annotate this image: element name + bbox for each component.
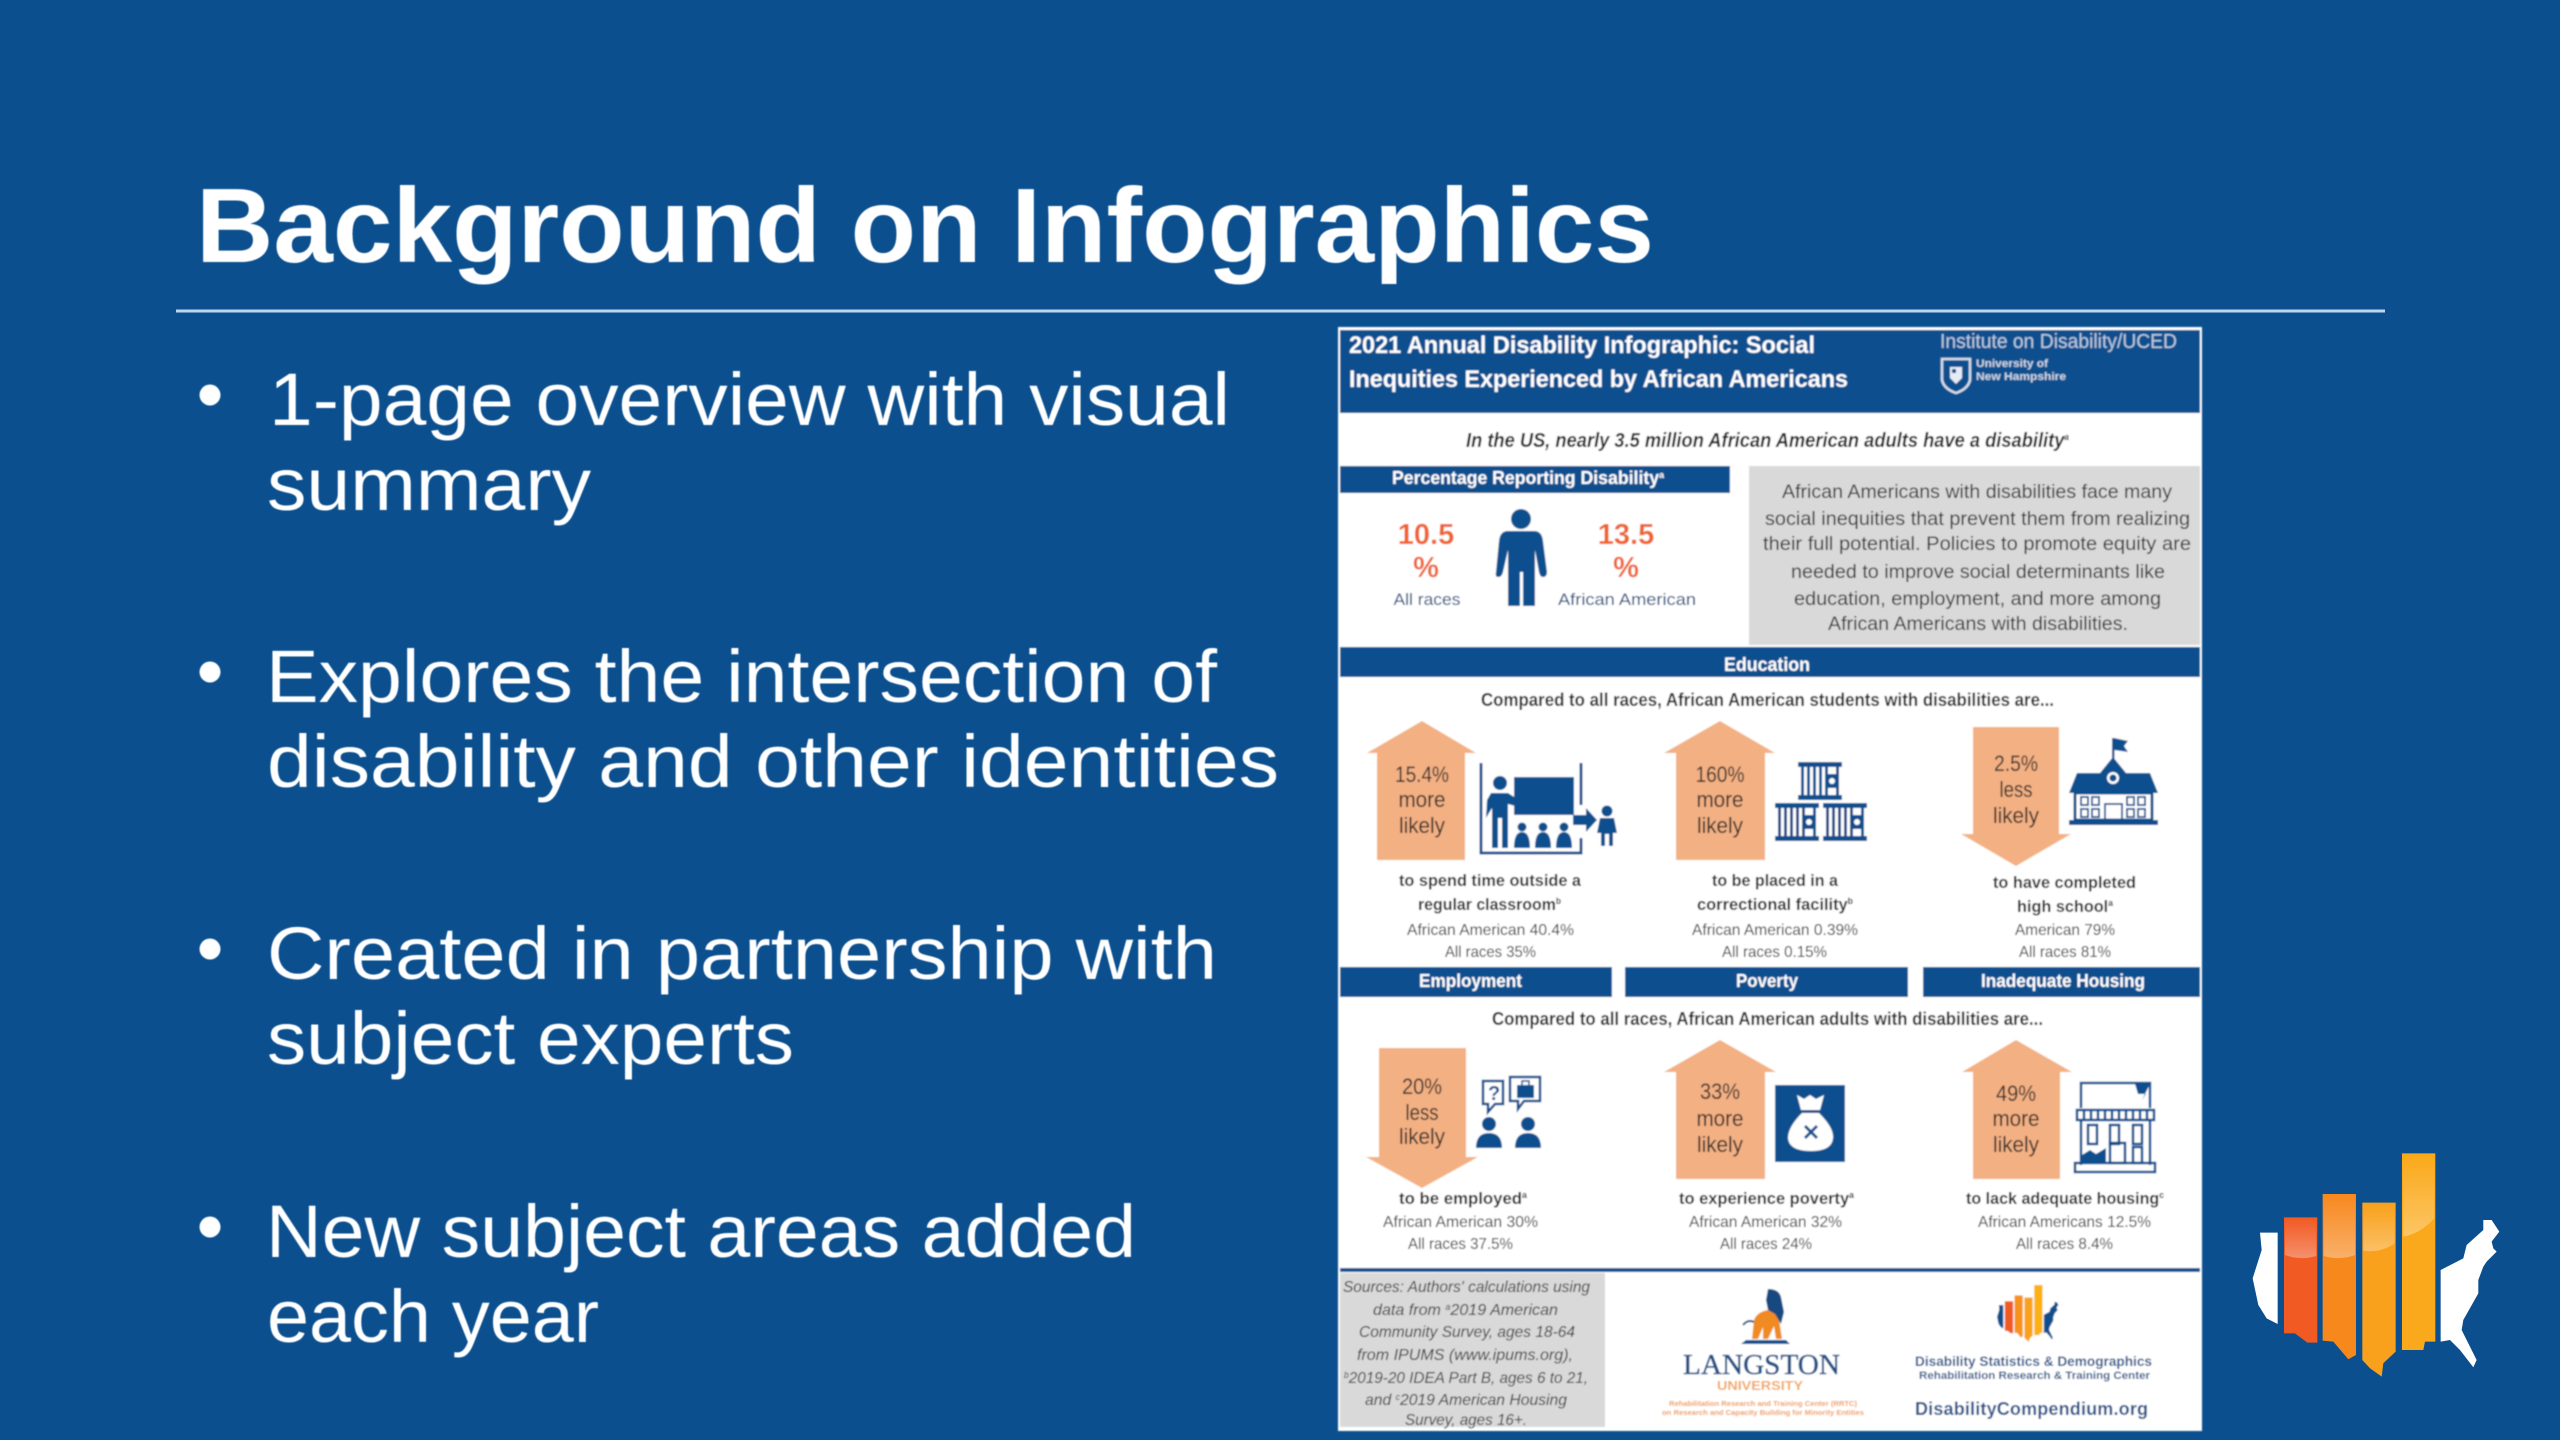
bullet 2: [200, 635, 1279, 803]
panel: sources: b: [1344, 1370, 1349, 1380]
section heading: percentage reporting disability: a: [1659, 470, 1665, 480]
caption: correctional facility: [1692, 871, 1858, 961]
arrow up: 49% more likely: more: [1992, 1106, 2040, 1131]
section heading: education: Education: [1724, 655, 1810, 676]
panel: sources: data from: [1373, 1302, 1441, 1319]
university name: [1976, 358, 2066, 383]
arrow up: 15.4% more likely: more: [1398, 787, 1446, 812]
bullet 4: [200, 1190, 1136, 1358]
center name: Rehabilitation Research and Training Center (RRTC): [1669, 1399, 1858, 1408]
panel: sources: a: [1445, 1302, 1450, 1312]
arrow down: 2.5% less likely: less: [2000, 777, 2032, 802]
icon: job interview: [1476, 1077, 1541, 1148]
panel: sources: from IPUMS (www.ipums.org),: [1357, 1347, 1573, 1364]
infographic title: Inequities Experienced by African Americans: [1349, 366, 1848, 393]
center name: Disability Statistics & Demographics: [1915, 1353, 2152, 1369]
arrow up: 15.4% more likely: likely: [1399, 813, 1445, 838]
bullet 2: Explores the intersection of: [266, 635, 1217, 718]
bullet 1: [200, 358, 1230, 526]
bar 3: [2362, 1203, 2396, 1377]
arrow down: 20% less likely: less: [1406, 1100, 1438, 1125]
logo: Disability Statistics and Demographics: [1915, 1285, 2152, 1419]
infographic header band: [1340, 330, 2200, 413]
caption: high school: a: [2108, 898, 2114, 908]
title rule: [176, 310, 2385, 312]
icon: person: [1496, 509, 1547, 606]
arrow up: 33% more likely: likely: [1697, 1132, 1743, 1157]
panel: summary text: education, employment, and more among: [1794, 588, 2161, 610]
bullet 4: each year: [267, 1275, 599, 1358]
section heading: percentage reporting disability: [1340, 466, 1730, 493]
bullet 1: 1-page overview with visual: [269, 358, 1230, 441]
panel: summary text: needed to improve social determinants like: [1791, 561, 2165, 583]
section heading: poverty: Poverty: [1736, 971, 1798, 991]
icon: mini map bars: [1997, 1285, 2058, 1342]
caption: high school: [1993, 873, 2136, 961]
arrow down: 2.5% less likely: likely: [1993, 803, 2039, 828]
website: DisabilityCompendium.org: [1915, 1399, 2148, 1419]
icon: east coast: [2441, 1220, 2499, 1367]
caption: correctional facility: African American 0.39%: [1692, 922, 1858, 939]
icon: damaged house: [2075, 1083, 2155, 1172]
center name: [1662, 1399, 1864, 1417]
icon: job interview: ?: [1488, 1083, 1500, 1105]
caption: poverty: [1679, 1189, 1855, 1253]
caption: high school: to have completed: [1993, 873, 2136, 892]
caption: outside regular classroom: [1399, 871, 1582, 961]
caption: employed: All races 37.5%: [1408, 1236, 1513, 1253]
panel: summary text: social inequities that prevent them from realizing: [1765, 508, 2190, 530]
section heading: percentage reporting disability: Percentage Reporting Disability: [1392, 468, 1664, 488]
caption: employed: to be employed: [1399, 1189, 1524, 1208]
title: Background on Infographics: [196, 167, 1654, 285]
arrow up: 49% more likely: 49%: [1996, 1081, 2036, 1106]
stat: all races: [1394, 519, 1460, 609]
bullet 3: Created in partnership with: [267, 912, 1217, 995]
icon: lion: [1741, 1289, 1790, 1344]
bar 1: [2284, 1217, 2317, 1343]
caption: housing: African Americans 12.5%: [1978, 1214, 2151, 1231]
arrow up: 33% more likely: 33%: [1700, 1079, 1740, 1104]
arrow up: 160% more likely: more: [1696, 787, 1744, 812]
caption: correctional facility: All races 0.15%: [1722, 944, 1827, 961]
caption: outside regular classroom: to spend time outside a: [1399, 871, 1582, 890]
caption: poverty: a: [1849, 1190, 1855, 1200]
caption: outside regular classroom: All races 35%: [1445, 944, 1536, 961]
stat: African American: African American: [1558, 590, 1696, 609]
section heading: inadequate housing: Inadequate Housing: [1981, 971, 2145, 991]
icon: money bag: [1775, 1085, 1845, 1162]
caption: housing: All races 8.4%: [2016, 1236, 2113, 1253]
caption: employed: a: [1522, 1190, 1528, 1200]
panel: sources: and: [1365, 1392, 1392, 1409]
caption: housing: to lack adequate housing: [1966, 1189, 2170, 1208]
caption: high school: American 79%: [2015, 922, 2115, 939]
stat: African American: 13.5: [1598, 519, 1654, 551]
panel: summary text: African Americans with disabilities.: [1828, 613, 2128, 635]
caption: poverty: All races 24%: [1720, 1236, 1812, 1253]
education intro: Compared to all races, African American students with disabilities are...: [1481, 689, 2054, 710]
arrow up: 15.4% more likely: 15.4%: [1395, 762, 1449, 787]
caption: poverty: African American 32%: [1689, 1214, 1842, 1231]
arrow up: 160% more likely: 160%: [1696, 762, 1744, 787]
icon: school: [2069, 738, 2158, 825]
infographic headline: a: [2064, 432, 2069, 442]
caption: employed: [1383, 1189, 1538, 1253]
stat: all races: %: [1413, 552, 1439, 584]
bullet 3: [200, 912, 1217, 1080]
adults intro: Compared to all races, African American adults with disabilities are...: [1492, 1008, 2043, 1029]
caption: housing: [1966, 1189, 2164, 1253]
caption: high school: All races 81%: [2019, 944, 2111, 961]
arrow up: 160% more likely: [1664, 721, 1775, 860]
section heading: education: [1340, 647, 2200, 677]
wordmark: LANGSTON: [1683, 1350, 1840, 1381]
stat: all races: 10.5: [1398, 519, 1454, 551]
panel: summary text: their full potential. Policies to promote equity are: [1763, 533, 2191, 555]
university name: New Hampshire: [1976, 371, 2066, 383]
arrow down: 20% less likely: 20%: [1402, 1074, 1442, 1099]
arrow up: 33% more likely: [1664, 1040, 1776, 1179]
arrow up: 15.4% more likely: [1367, 721, 1476, 860]
institute name: Institute on Disability/UCED: [1940, 331, 2177, 353]
arrow up: 33% more likely: more: [1696, 1106, 1744, 1131]
panel: sources: Community Survey, ages 18-64: [1359, 1324, 1575, 1341]
stat: African American: %: [1613, 552, 1639, 584]
arrow down: 2.5% less likely: [1961, 727, 2071, 866]
icon: west coast: [2253, 1233, 2278, 1324]
bullet 1: summary: [267, 443, 591, 526]
caption: employed: African American 30%: [1383, 1214, 1538, 1231]
arrow up: 49% more likely: likely: [1993, 1132, 2039, 1157]
icon: classroom: [1481, 763, 1617, 853]
panel: summary text: [1749, 466, 2200, 645]
center name: on Research and Capacity Building for Minority Entities: [1662, 1408, 1864, 1417]
panel: sources: [1340, 1273, 1605, 1429]
panel: infographic thumbnail: [1338, 327, 2202, 1431]
icon: UNH shield: [1942, 359, 1970, 393]
bullet list: [200, 358, 1279, 1358]
infographic title: [1349, 332, 1848, 393]
sub wordmark: UNIVERSITY: [1717, 1378, 1803, 1393]
center subtitle: Rehabilitation Research & Training Center: [1919, 1370, 2151, 1382]
arrow up: 49% more likely: [1962, 1040, 2072, 1179]
caption: correctional facility: correctional facility: [1697, 895, 1853, 914]
caption: housing: c: [2159, 1190, 2164, 1200]
infographic title: 2021 Annual Disability Infographic: Social: [1349, 332, 1815, 359]
panel: sources: 2019 American Housing: [1399, 1392, 1567, 1409]
section heading: inadequate housing: [1923, 967, 2200, 997]
stat: African American: [1558, 519, 1696, 609]
panel: sources: Sources: Authors' calculations using: [1343, 1279, 1590, 1296]
section heading: employment: [1340, 967, 1612, 997]
bullet 2: disability and other identities: [267, 720, 1279, 803]
caption: outside regular classroom: African American 40.4%: [1407, 922, 1574, 939]
bar 4: [2402, 1153, 2435, 1350]
arrow down: 20% less likely: [1366, 1048, 1478, 1188]
caption: poverty: to experience poverty: [1679, 1189, 1855, 1208]
caption: outside regular classroom: regular classroom: [1418, 895, 1565, 914]
arrow up: 160% more likely: likely: [1697, 813, 1743, 838]
icon: correctional cells: [1775, 762, 1867, 841]
caption: correctional facility: b: [1848, 896, 1853, 906]
arrow down: 2.5% less likely: 2.5%: [1994, 751, 2038, 776]
caption: correctional facility: to be placed in a: [1712, 871, 1839, 890]
arrow down: 20% less likely: likely: [1399, 1124, 1445, 1149]
section heading: employment: Employment: [1419, 971, 1522, 991]
logo: Langston University: [1662, 1289, 1864, 1417]
logo: USA bar chart map: [2253, 1153, 2499, 1377]
stat: all races: All races: [1394, 590, 1460, 609]
caption: outside regular classroom: b: [1556, 896, 1561, 906]
university name: University of: [1976, 358, 2048, 370]
bullet 4: New subject areas added: [266, 1190, 1136, 1273]
panel: sources: c: [1396, 1392, 1400, 1402]
caption: high school: high school: [2017, 897, 2112, 916]
panel: sources: 2019 American: [1449, 1302, 1558, 1319]
panel: sources: Survey, ages 16+.: [1405, 1412, 1527, 1429]
bullet 3: subject experts: [267, 997, 794, 1080]
bar 2: [2323, 1194, 2356, 1359]
infographic headline: In the US, nearly 3.5 million African American adults have a disability: [1466, 430, 2120, 452]
panel: sources: 2019-20 IDEA Part B, ages 6 to 21,: [1348, 1370, 1588, 1387]
section heading: poverty: [1625, 967, 1908, 997]
panel: summary text: African Americans with disabilities face many: [1782, 481, 2172, 503]
